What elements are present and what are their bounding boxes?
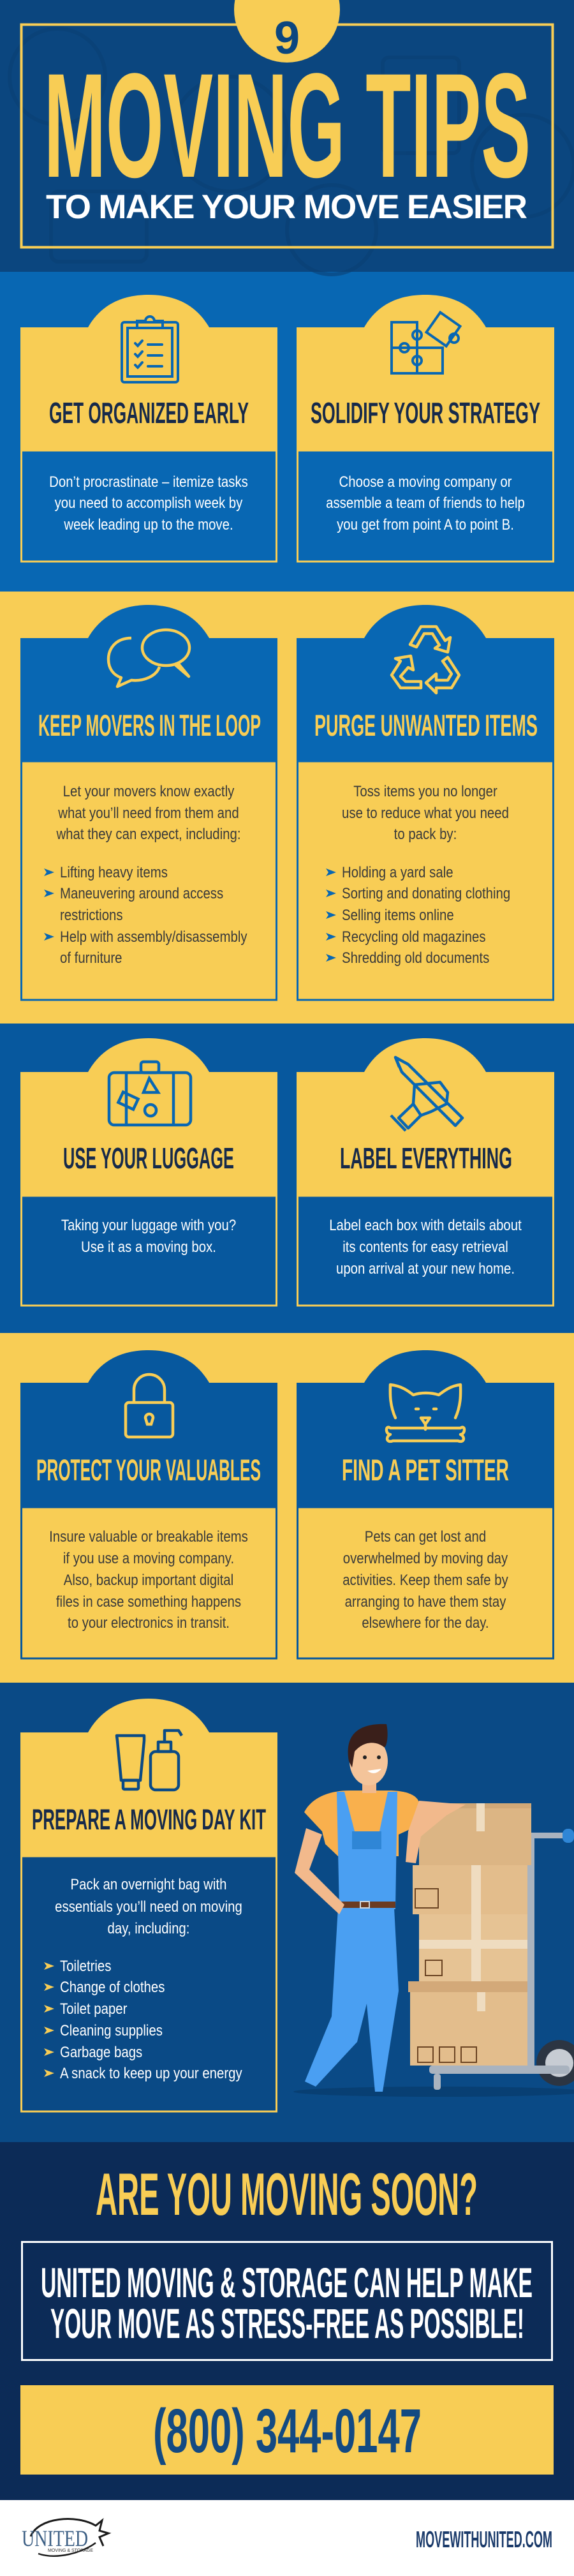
badge: 9: 9	[274, 13, 300, 64]
text block: Toss items you no longer	[353, 782, 497, 800]
text block	[49, 473, 248, 533]
text block: Toiletries	[60, 1957, 111, 1974]
dolly	[527, 1833, 534, 2074]
text block: arranging to have them stay	[345, 1593, 506, 1610]
text block: of furniture	[60, 949, 122, 966]
phone box: (800) 344-0147	[153, 2396, 422, 2466]
icon: padlock	[126, 1374, 173, 1437]
icon: toiletry bottles	[117, 1731, 182, 1790]
phone box	[20, 2385, 554, 2475]
text block: Choose a moving company or	[339, 473, 512, 490]
text block: Lifting heavy items	[60, 863, 168, 881]
text block: you need to accomplish week by	[55, 494, 243, 511]
icon: puzzle	[392, 313, 460, 373]
heading: KEEP MOVERS IN THE LOOP	[38, 708, 261, 742]
text block: to your electronics in transit.	[68, 1614, 230, 1631]
panel: use your luggage	[20, 1038, 277, 1306]
text block: to pack by:	[394, 825, 457, 842]
text block: Maneuvering around access	[60, 884, 223, 902]
panel: purge unwanted items	[297, 605, 554, 1000]
logo: United Moving & Storage: UNITED	[22, 2526, 88, 2551]
text block	[56, 782, 247, 966]
icon: recycle	[392, 627, 459, 693]
heading: PROTECT YOUR VALUABLES	[36, 1453, 261, 1487]
text block	[329, 1216, 522, 1277]
callout: are you moving soon	[0, 2138, 574, 2360]
text block: what you’ll need from them and	[57, 804, 239, 821]
heading: GET ORGANIZED EARLY	[49, 396, 249, 429]
text block: Pets can get lost and	[365, 1528, 486, 1545]
text block: Holding a yard sale	[342, 863, 453, 881]
text block: day, including:	[108, 1919, 189, 1937]
text block: you get from point A to point B.	[337, 516, 514, 533]
text block: if you use a moving company.	[63, 1549, 234, 1567]
text block: Pack an overnight bag with	[71, 1875, 226, 1893]
text block: upon arrival at your new home.	[336, 1260, 515, 1277]
text block	[55, 1875, 242, 2081]
text block: Sorting and donating clothing	[342, 884, 510, 902]
text block: Let your movers know exactly	[63, 782, 235, 800]
text block: A snack to keep up your energy	[60, 2064, 242, 2081]
man	[305, 1908, 399, 2092]
text block: Change of clothes	[60, 1978, 165, 1995]
text block: Selling items online	[342, 906, 454, 923]
header frame	[22, 24, 552, 248]
icon: dog with bone	[386, 1385, 464, 1441]
text block: restrictions	[60, 906, 123, 923]
text block: assemble a team of friends to help	[326, 494, 525, 511]
text block: essentials you’ll need on moving	[55, 1898, 242, 1915]
heading: USE YOUR LUGGAGE	[63, 1142, 234, 1175]
panel: get organized early	[20, 295, 277, 562]
heading: PREPARE A MOVING DAY KIT	[32, 1803, 266, 1836]
text block: use to reduce what you need	[342, 804, 509, 821]
panel: label everything	[297, 1038, 554, 1306]
text block: Help with assembly/disassembly	[60, 928, 247, 945]
text block: Garbage bags	[60, 2043, 142, 2060]
text block: Recycling old magazines	[342, 928, 486, 945]
text block: activities. Keep them safe by	[342, 1571, 509, 1588]
panel: find a pet sitter	[297, 1350, 554, 1658]
text block: Use it as a moving box.	[81, 1238, 216, 1255]
text block: Taking your luggage with you?	[61, 1216, 236, 1233]
panel: solidify your strategy	[297, 295, 554, 562]
text block	[342, 782, 510, 966]
panel: prepare a moving day kit	[20, 1699, 277, 2111]
badge: 9	[234, 0, 340, 64]
text block: Shredding old documents	[342, 949, 489, 966]
text block: overwhelmed by moving day	[343, 1549, 508, 1567]
logo: United Moving & Storage	[22, 2519, 108, 2556]
icon: luggage	[109, 1062, 191, 1125]
text block: week leading up to the move.	[63, 516, 233, 533]
text block: Also, backup important digital	[64, 1571, 233, 1588]
icon: clipboard	[122, 316, 178, 382]
text block: files in case something happens	[56, 1593, 241, 1610]
logo: United Moving & Storage: MOVING & STORAGE	[48, 2549, 93, 2553]
text block	[326, 473, 525, 533]
text block	[61, 1216, 236, 1255]
text block: elsewhere for the day.	[362, 1614, 489, 1631]
panel: keep movers in the loop	[20, 605, 277, 1000]
boxes	[410, 1991, 527, 2066]
text block: Cleaning supplies	[60, 2021, 163, 2039]
text block	[342, 1528, 509, 1631]
text block: Toilet paper	[60, 2000, 128, 2017]
text block: Don’t procrastinate – itemize tasks	[49, 473, 248, 490]
illustration: mover with boxes on dolly	[293, 1724, 574, 2097]
icon: chat bubbles	[108, 630, 189, 687]
text block: what they can expect, including:	[56, 825, 241, 842]
subtitle: TO MAKE YOUR MOVE EASIER	[46, 188, 527, 226]
text block: Label each box with details about	[329, 1216, 522, 1233]
text block	[49, 1528, 248, 1631]
text block: Insure valuable or breakable items	[49, 1528, 248, 1545]
panel: protect your valuables	[20, 1350, 277, 1658]
icon: hand with pencil	[391, 1057, 462, 1131]
text block: its contents for easy retrieval	[342, 1238, 508, 1255]
